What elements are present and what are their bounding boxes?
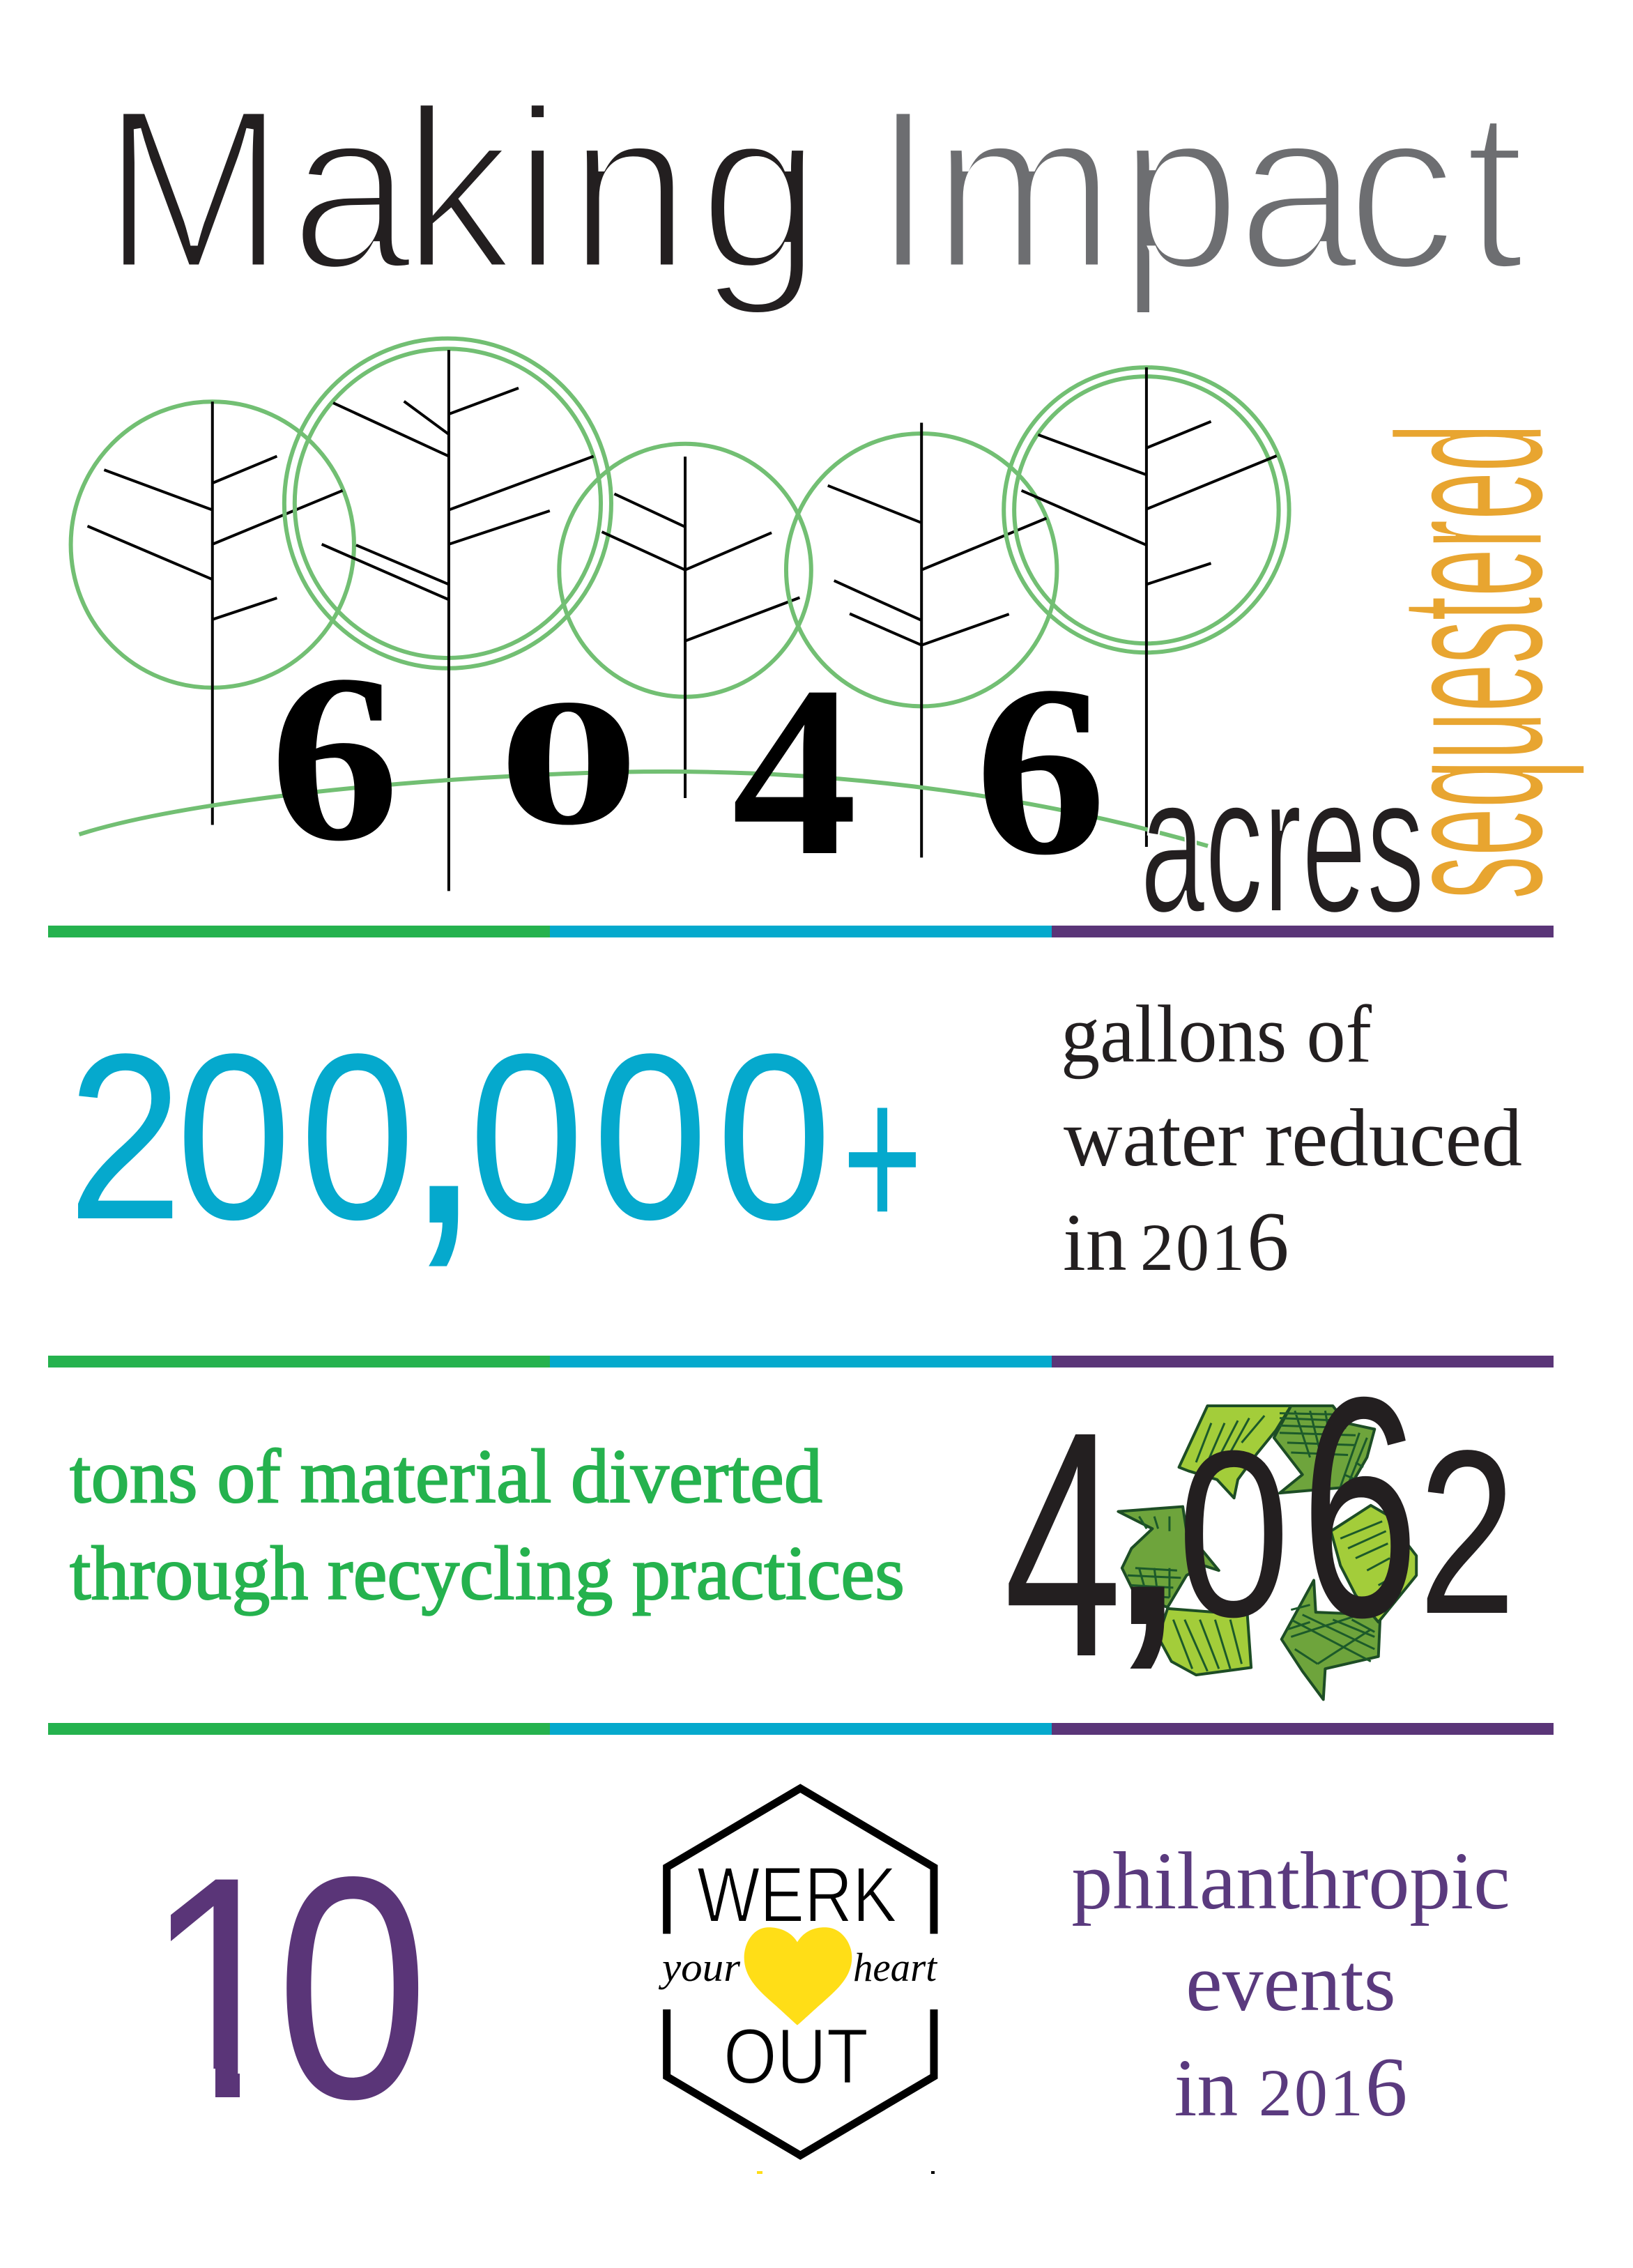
number: 4,062: 6 <box>1301 1332 1419 1683</box>
title: Making <box>102 60 821 319</box>
logo hexagon <box>667 1788 934 2155</box>
number: 10: 10 <box>144 1811 429 2165</box>
number: 200,000+: 200 <box>68 1006 415 1269</box>
text: gallons of water reduced: 201 <box>1140 1210 1247 1285</box>
number: 200,000+: , <box>402 913 485 1295</box>
number: 4,062: , <box>1099 1308 1195 1698</box>
label: acres: acres <box>1140 735 1425 953</box>
logo words: WERK <box>697 1851 897 1938</box>
number: 4,062: 0 <box>1177 1402 1290 1666</box>
number: 6046: 0 <box>498 662 640 863</box>
number: 200,000+ <box>68 913 923 1295</box>
text: tons of material diverted <box>70 1434 905 1616</box>
divider 1 <box>48 926 1554 937</box>
divider 2 <box>48 1356 1554 1367</box>
tree 3 <box>559 444 811 798</box>
logo words <box>697 1851 897 2100</box>
logo heart <box>744 1927 852 2025</box>
number: 6046 <box>270 625 1107 906</box>
text: gallons of water reduced: in <box>1063 1197 1127 1288</box>
number: 4,062 <box>1004 1308 1516 1724</box>
text: philanthropic events: philanthropic <box>1071 1835 1510 1926</box>
number: 6046: 6 <box>270 625 399 891</box>
number: 6046: 6 <box>974 635 1107 905</box>
text: gallons of water reduced: 6 <box>1247 1195 1289 1289</box>
title <box>102 60 1526 319</box>
text: philanthropic events <box>1071 1835 1510 2134</box>
text: gallons of water reduced: gallons of <box>1061 988 1372 1080</box>
text: tons of material diverted: through recycling practices <box>70 1531 905 1616</box>
logo: werk your heart out <box>659 1788 938 2174</box>
text: philanthropic events: events <box>1186 1937 1396 2028</box>
logo script: heart <box>853 1945 938 1990</box>
number: 4,062: 2 <box>1418 1402 1516 1662</box>
text: gallons of water reduced: water reduced <box>1064 1092 1522 1183</box>
tree 5 <box>1004 367 1289 847</box>
number: 4,062: 4 <box>1004 1364 1122 1724</box>
number: 200,000+: 000 <box>469 1006 831 1269</box>
tree 4 <box>786 423 1057 857</box>
hill <box>79 772 1208 846</box>
tree 1 <box>71 401 354 825</box>
number: 6046: 4 <box>732 636 857 906</box>
number: 200,000+: + <box>842 1039 923 1275</box>
title: Impact <box>873 60 1526 319</box>
icon: recycling arrows <box>1118 1406 1416 1699</box>
logo words: OUT <box>723 2013 868 2100</box>
text: gallons of water reduced <box>1061 988 1522 1289</box>
text: tons of material diverted: tons of material diverted <box>70 1434 822 1519</box>
text: philanthropic events: in 2016 <box>1174 2041 1407 2134</box>
logo script <box>659 1945 938 1990</box>
divider 3 <box>48 1723 1554 1735</box>
illustration: trees and hill <box>71 339 1289 891</box>
logo script: your <box>659 1945 740 1990</box>
tree 2 <box>284 339 611 891</box>
